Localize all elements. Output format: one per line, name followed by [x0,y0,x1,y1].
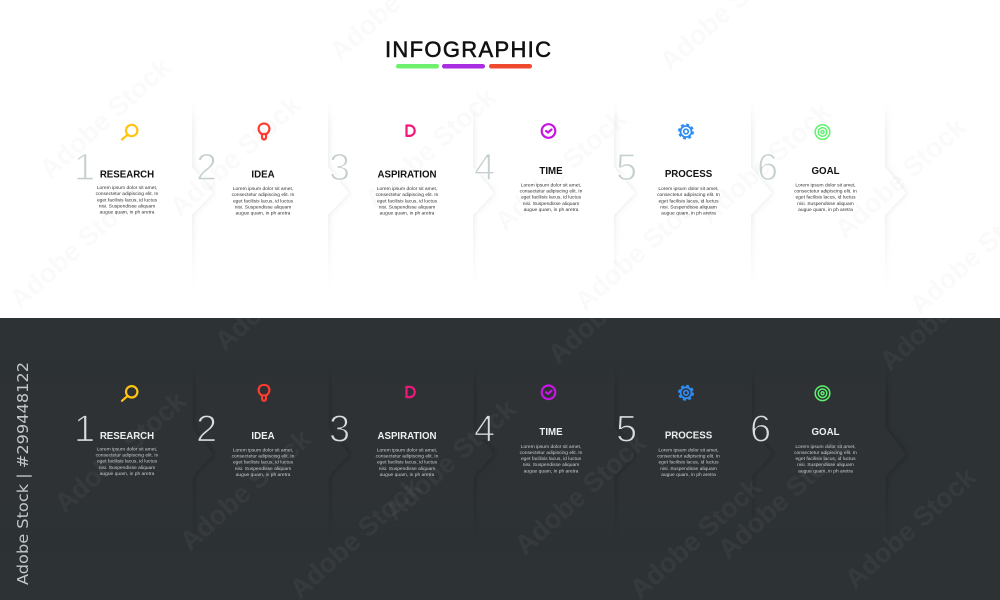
step 2 idea [196,124,295,216]
step 5 process: Lorem ipsum dolor sit amet, [658,186,719,192]
step 4 time dark: consectetur adipiscing elit. In [520,450,583,456]
watermark: light section [4,0,1000,320]
stock id side label: Adobe Stock | #299448122 [14,362,32,585]
step 2 idea: eget facilisis lacus, id luctus [233,198,294,204]
step 5 process: consectetur adipiscing elit. In [657,192,720,198]
step 6 goal [757,125,857,213]
step 6 goal: augue quam, in ph aretra [798,207,853,213]
step 6 goal dark: 6 [750,408,771,450]
step 3 aspiration: Lorem ipsum dolor sit amet, [377,186,437,192]
step 5 process dark: Lorem ipsum dolor sit amet, [658,447,719,453]
light row of steps [74,124,857,216]
step 6 goal: 6 [757,147,778,189]
step 2 idea dark: 2 [196,408,217,450]
step 5 process dark: augue quam, in ph aretra [661,472,716,478]
icon: gear [679,386,693,400]
step 6 goal: GOAL [812,166,840,177]
step 6 goal: consectetur adipiscing elit. In [794,188,857,194]
step 1 research dark: 1 [74,408,95,450]
step 5 process: nisi. Suspendisse aliquam [660,204,717,210]
step 5 process dark [616,386,720,478]
step 6 goal dark: nisi. Suspendisse aliquam [797,462,854,468]
step 1 research dark: RESEARCH [100,431,154,442]
step 6 goal dark: Lorem ipsum dolor sit amet, [795,444,856,450]
step 3 aspiration: consectetur adipiscing elit. In [376,192,439,198]
icon: target [815,386,830,401]
step 5 process dark: nisi. Suspendisse aliquam [660,466,717,472]
step 3 aspiration dark: augue quam, in ph aretra [380,472,435,478]
step 1 research: 1 [74,147,95,189]
watermark: dark section: Adobe Stock [542,236,685,369]
icon: light bulb [259,124,269,140]
step 2 idea dark: eget facilisis lacus, id luctus [233,460,294,466]
step 1 research: Lorem ipsum dolor sit amet, [97,185,157,191]
step 2 idea: consectetur adipiscing elit. In [232,192,295,198]
step 2 idea: nisi. Suspendisse aliquam [235,204,291,210]
step 4 time dark: 4 [474,408,495,450]
watermark: dark section: Adobe Stock [712,431,855,564]
watermark: dark section: Adobe Stock [209,223,352,356]
step 2 idea dark: consectetur adipiscing elit. In [232,453,295,459]
step 5 process: PROCESS [665,169,713,180]
step 1 research dark: consectetur adipiscing elit. In [96,452,159,458]
light background panel [0,0,1000,318]
step 2 idea dark: augue quam, in ph aretra [236,472,291,478]
step 2 idea: 2 [196,147,217,189]
step 5 process [616,124,720,216]
watermark: dark section: Adobe Stock [509,427,652,560]
step 1 research: consectetur adipiscing elit. In [96,191,159,197]
step 5 process: eget facilisis lacus, id luctus [658,198,719,204]
step 4 time: Lorem ipsum dolor sit amet, [521,182,581,188]
step 3 aspiration dark: 3 [329,408,350,450]
step 6 goal: nisi. Suspendisse aliquam [797,201,854,207]
step 5 process: augue quam, in ph aretra [661,210,716,216]
watermark: dark section: Adobe Stock [839,461,982,594]
watermark: dark section: Adobe Stock [379,393,522,526]
step 5 process dark: PROCESS [665,430,713,441]
step 2 idea dark: IDEA [251,431,275,442]
step 4 time [474,124,583,213]
step 5 process: 5 [616,147,637,189]
step 6 goal dark: augue quam, in ph aretra [798,468,853,474]
light chevron panels [192,118,906,248]
step 1 research: RESEARCH [100,170,154,180]
step 4 time dark: Lorem ipsum dolor sit amet, [521,444,581,450]
step 1 research: augue quam, in ph aretra [100,210,155,216]
step 1 research dark: augue quam, in ph aretra [100,471,155,477]
step 3 aspiration dark: consectetur adipiscing elit. In [376,453,439,459]
step 3 aspiration: 3 [329,147,350,189]
title: INFOGRAPHIC [385,37,551,62]
step 3 aspiration: nisi. Suspendisse aliquam [379,204,435,210]
step 2 idea dark: Lorem ipsum dolor sit amet, [233,447,293,453]
dark background panel [0,318,1000,600]
dark row of steps [74,385,857,478]
step 4 time dark: eget facilisis lacus, id luctus [521,456,582,462]
step 1 research: nisi. Suspendisse aliquam [99,204,155,210]
step 5 process dark: 5 [616,408,637,450]
step 3 aspiration: augue quam, in ph aretra [380,210,435,216]
step 3 aspiration dark: Lorem ipsum dolor sit amet, [377,447,437,453]
step 1 research dark: Lorem ipsum dolor sit amet, [97,446,157,452]
icon: magnifier [122,386,137,401]
step 4 time: nisi. Suspendisse aliquam [523,201,579,207]
step 1 research [74,125,159,216]
step 1 research dark [74,386,159,477]
step 6 goal dark: consectetur adipiscing elit. In [794,450,857,456]
icon: target [815,125,830,139]
step 4 time: consectetur adipiscing elit. In [520,188,583,194]
step 3 aspiration: ASPIRATION [377,170,437,180]
step 2 idea dark [196,385,295,478]
step 1 research: eget facilisis lacus, id luctus [97,197,158,203]
step 4 time dark: nisi. Suspendisse aliquam [523,462,579,468]
watermark: dark section: Adobe Stock [49,385,192,518]
step 2 idea dark: nisi. Suspendisse aliquam [235,466,291,472]
icon: clock check [542,386,555,399]
icon: D badge [406,126,415,136]
title underline bars [396,64,532,68]
step 6 goal dark [750,386,857,474]
icon: D badge [406,387,415,397]
step 4 time: TIME [539,166,563,177]
watermark: dark section [49,223,1000,600]
step 2 idea: Lorem ipsum dolor sit amet, [233,186,293,192]
step 6 goal dark: eget facilisis lacus, id luctus [795,456,856,462]
icon: light bulb [259,385,269,401]
step 1 research dark: nisi. Suspendisse aliquam [99,465,155,471]
step 5 process dark: consectetur adipiscing elit. In [657,453,720,459]
step 4 time dark: augue quam, in ph aretra [524,468,579,474]
step 2 idea: augue quam, in ph aretra [236,210,291,216]
step 4 time: eget facilisis lacus, id luctus [521,195,582,201]
icon: magnifier [122,125,137,140]
step 2 idea: IDEA [251,170,275,180]
step 4 time: augue quam, in ph aretra [524,207,579,213]
watermark: dark section: Adobe Stock [174,423,317,556]
step 3 aspiration dark [329,387,439,478]
icon: gear [679,124,693,138]
dark chevron panels [212,452,906,456]
step 6 goal: eget facilisis lacus, id luctus [795,195,856,201]
step 4 time dark [474,386,583,474]
step 4 time: 4 [474,147,495,189]
step 3 aspiration dark: eget facilisis lacus, id luctus [377,460,438,466]
step 3 aspiration dark: ASPIRATION [377,431,437,442]
step 4 time dark: TIME [539,427,563,438]
step 5 process dark: eget facilisis lacus, id luctus [658,460,719,466]
step 3 aspiration [329,126,439,216]
step 3 aspiration dark: nisi. Suspendisse aliquam [379,466,435,472]
icon: clock check [542,124,555,138]
step 6 goal dark: GOAL [812,427,840,438]
step 3 aspiration: eget facilisis lacus, id luctus [377,198,438,204]
step 1 research dark: eget facilisis lacus, id luctus [97,459,158,465]
step 6 goal: Lorem ipsum dolor sit amet, [795,182,856,188]
